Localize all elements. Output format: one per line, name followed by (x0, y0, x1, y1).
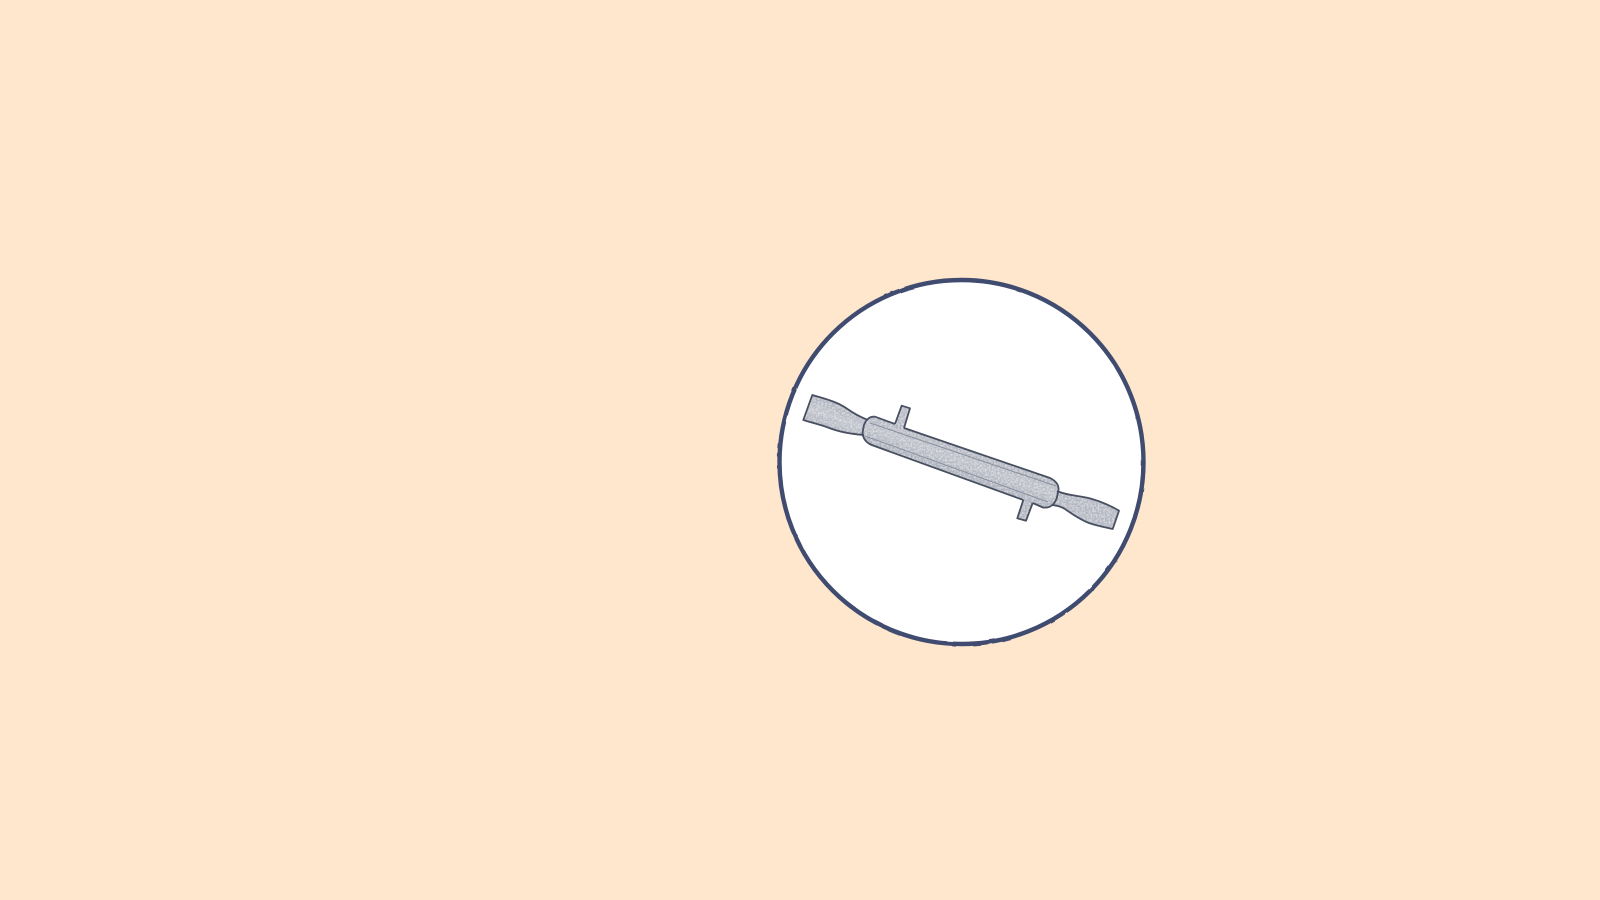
inner tube lines (865, 423, 1056, 502)
icon: glass condenser tube (803, 395, 1119, 529)
tube outlines (803, 395, 1119, 529)
circle panel (780, 280, 1144, 644)
